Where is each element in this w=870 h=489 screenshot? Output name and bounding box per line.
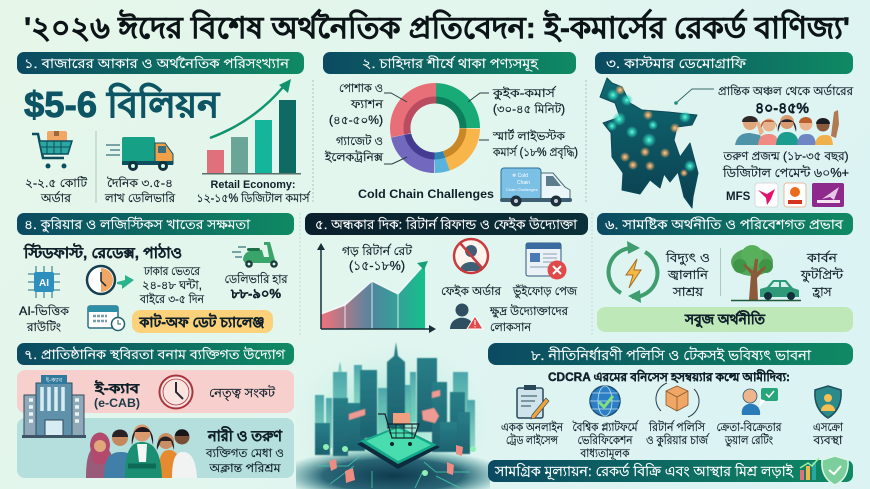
circuit base <box>296 426 490 489</box>
illustration: women and youth <box>86 424 197 478</box>
icon: cart <box>32 131 72 168</box>
MFS logos <box>726 183 844 207</box>
icon: growth and shield <box>800 456 848 485</box>
delivery rate: ৮৮-৯০% <box>230 286 281 301</box>
label: global platform verification <box>572 420 639 461</box>
callout: green economy <box>597 307 853 332</box>
label: orders: ২-২.৫ কোটি <box>25 176 88 190</box>
label: global platform verification: বাধ্যতামূলক <box>580 448 630 461</box>
heading 3 <box>595 52 853 74</box>
label: average return rate: গড় রিটার্ন রেট <box>342 244 412 258</box>
label: energy savings: সাশ্রয় <box>672 285 704 299</box>
icon: AI chip: AI <box>39 278 49 289</box>
label: escrow: ব্যবস্থা <box>812 435 843 447</box>
labels: fake <box>441 283 578 299</box>
icon: fake order <box>453 238 489 274</box>
labels: fake: ফেইক অর্ডার <box>441 284 502 298</box>
callout: cut-off date <box>132 310 273 333</box>
label: e-CAB: ই-ক্যাব <box>94 379 141 396</box>
icon: energy cycle <box>609 241 657 303</box>
icon: cold chain van: Chain Challenges <box>506 187 538 192</box>
teal band <box>17 418 294 478</box>
label: average return rate <box>342 244 412 273</box>
skyline <box>315 342 475 456</box>
label: dual rating: ডুয়াল রেটিং <box>724 433 773 448</box>
icon: scooter <box>232 242 278 268</box>
label: return policy <box>646 420 710 448</box>
label: daily delivery <box>104 176 176 205</box>
label: single trade license: ট্রেড লাইসেন্স <box>506 433 559 447</box>
label: AI routing: AI-ভিত্তিক <box>19 304 70 318</box>
label: loss <box>489 304 569 334</box>
icon: cold chain van: Chain <box>517 180 530 186</box>
youth and payment text: ডিজিটাল পেমেন্ট ৬০%+ <box>722 165 849 180</box>
icon: delivery truck <box>106 137 173 171</box>
heading 3: ৩. কাস্টমার ডেমোগ্রাফি <box>606 56 747 71</box>
panel: dark side <box>305 213 588 334</box>
panel: top products <box>323 52 578 206</box>
illustration: digital city <box>296 340 490 489</box>
label: orders: অর্ডার <box>40 191 72 205</box>
label: e-CAB: (e-CAB) <box>94 396 140 410</box>
label: global platform verification: ভেরিফিকেশন <box>578 433 634 447</box>
illustration: young people <box>735 110 839 145</box>
icon: small entrepreneur warning <box>450 304 483 329</box>
label: loss: লোকসান <box>490 322 532 334</box>
label: women and youth: ব্যক্তিগত মেধা ও <box>205 446 284 460</box>
label: retail economy: Retail Economy: <box>210 179 296 191</box>
youth and payment text: তরুণ প্রজন্ম (১৮-৩৫ বছর) <box>723 149 848 163</box>
icon: escrow shield <box>815 386 841 418</box>
panel: market size <box>17 52 311 205</box>
label: orders <box>25 176 88 205</box>
heading 2: ২. চাহিদার শীর্ষে থাকা পণ্যসমূহ <box>362 56 539 72</box>
panel: customer demographics <box>595 52 854 208</box>
labels: fashion and gadgets: ইলেকট্রনিক্স <box>324 150 384 164</box>
label: AI routing <box>19 304 70 334</box>
label: carbon footprint: কার্বন <box>806 250 838 265</box>
label: women and youth: নারী ও তরুণ <box>207 426 283 445</box>
panel: institutional stagnation vs individual enterprise <box>17 343 294 478</box>
callout: green economy: সবুজ অর্থনীতি <box>684 310 765 329</box>
heading 8 <box>488 343 853 365</box>
delivery time text: ২৪-৪৮ ঘন্টা, <box>142 278 202 292</box>
label: e-CAB <box>94 379 141 410</box>
labels: fashion and gadgets: পোশাক ও <box>339 83 383 95</box>
footer bar: সামগ্রিক মূল্যায়ন: রেকর্ড বিক্রি এবং আস্থার মিশ্র লড়াই <box>494 463 794 480</box>
heading 2 <box>323 52 576 74</box>
heading 4 <box>17 213 294 235</box>
icon: globe check <box>590 386 620 416</box>
marginal area stat <box>718 84 854 117</box>
panel: policy and sustainability <box>488 343 853 485</box>
label: dual rating: ক্রেতা-বিক্রেতার <box>716 420 782 434</box>
marginal area stat: ৪০-৪৫% <box>755 100 809 117</box>
city glow <box>296 340 490 489</box>
icon: shopping cart <box>378 413 419 446</box>
delivery rate: ডেলিভারি হার <box>224 272 288 286</box>
delivery time text: বাইরে ৩-৫ দিন <box>139 292 205 306</box>
label: loss: ক্ষুদ্র উদ্যোক্তাদের <box>489 304 569 319</box>
icon: cold chain van <box>500 168 572 206</box>
subtitle: CDCRA এরমের বনিসেস হসম্বয়্যার কল্মে আমীদিব্য: <box>548 369 790 384</box>
callout: cut-off date: কাট-অফ ডেট চ্যালেঞ্জ <box>138 313 265 330</box>
labels: fake: ভুঁইফোড় পেজ <box>512 283 578 299</box>
labels: fashion and gadgets: (৪৫-৫০%) <box>329 115 383 127</box>
donut chart <box>384 82 489 174</box>
area chart: return rate <box>317 243 436 333</box>
heading 7: ৭. প্রাতিষ্ঠানিক স্থবিরতা বনাম ব্যক্তিগত উদ্যোগ <box>24 347 286 362</box>
panel: courier and logistics <box>17 213 294 334</box>
icon: calendar <box>88 306 124 330</box>
labels: quick commerce and livestock <box>492 86 578 160</box>
icon: clock <box>160 376 192 408</box>
map of Bangladesh <box>600 78 698 208</box>
label: escrow <box>812 422 844 447</box>
icon: e-CAB building: ই-ক্যাব <box>45 377 63 384</box>
delivery time text <box>139 266 205 306</box>
label: escrow: এসক্রো <box>813 422 844 434</box>
heading 1 <box>17 52 304 74</box>
delivery time text: ঢাকার ভেতরে <box>143 266 201 278</box>
heading 5 <box>305 213 588 235</box>
label: single trade license <box>501 420 564 447</box>
label: leadership crisis: নেতৃত্ব সংকট <box>209 385 276 401</box>
label: energy savings: জ্বালানি <box>667 267 709 282</box>
label: energy savings <box>665 250 710 299</box>
icon: cold chain van: ❄ Cold <box>512 173 528 179</box>
label: dual rating <box>716 420 782 448</box>
labels: quick commerce and livestock: (৩০-৪৫ মিনিট) <box>493 102 565 116</box>
courier names: স্টিডফাস্ট, রেডেক্স, পাঠাও <box>23 243 182 262</box>
label: carbon footprint: হ্রাস <box>812 285 832 299</box>
label: retail economy: ১২-১৫% ডিজিটাল কমার্স <box>196 191 311 205</box>
label: global platform verification: বৈশ্বিক প্ল্যাটফর্মে <box>572 420 639 434</box>
label: cold chain: Cold Chain Challenges <box>358 187 494 201</box>
panel: macro economy and environment <box>597 213 853 332</box>
icon: clock with arrow <box>87 266 134 294</box>
label: return policy: রিটার্ন পলিসি <box>648 420 706 434</box>
icon: tree and car <box>731 245 801 300</box>
labels: fashion and gadgets <box>324 83 384 164</box>
label: carbon footprint: ফুটপ্রিন্ট <box>800 267 844 283</box>
big number: $5-6 বিলিয়ন <box>24 83 221 125</box>
heading 7 <box>17 343 294 365</box>
label: single trade license: একক অনলাইন <box>501 420 564 434</box>
label: women and youth: অক্লান্ত পরিশ্রম <box>208 461 281 475</box>
icon: AI chip <box>28 266 60 298</box>
labels: fashion and gadgets: ফ্যাশন <box>350 99 384 111</box>
icon: return box <box>656 383 699 417</box>
label: carbon footprint <box>800 250 844 299</box>
footer bar <box>488 456 853 485</box>
heading 6 <box>597 213 853 235</box>
heading 5: ৫. অন্ধকার দিক: রিটার্ন রিফান্ড ও ফেইক উদ্যোক্তা <box>315 217 577 232</box>
icon: dual rating <box>742 388 778 415</box>
labels: quick commerce and livestock: কুইক-কমার্স <box>492 86 557 101</box>
callout line <box>674 89 714 105</box>
icon: fake page <box>526 243 566 280</box>
labels: fashion and gadgets: গ্যাজেট ও <box>336 134 383 148</box>
labels: quick commerce and livestock: স্মার্ট লাইভস্টক <box>492 129 566 143</box>
label: average return rate: (১৫-১৮%) <box>349 258 405 273</box>
bar chart with growth arrow <box>202 79 301 174</box>
pink band <box>17 370 294 413</box>
label: retail economy <box>196 179 311 205</box>
label: daily delivery: লাখ ডেলিভারি <box>104 191 176 205</box>
MFS logos: MFS <box>726 191 751 203</box>
heading 1: ১. বাজারের আকার ও অর্থনৈতিক পরিসংখ্যান <box>24 56 289 71</box>
heading 8: ৮. নীতিনির্ধারণী পলিসি ও টেকসই ভবিষ্যৎ ভাবনা <box>531 347 812 363</box>
youth and payment text <box>722 149 849 180</box>
icon: clipboard license <box>517 385 549 419</box>
title: '২০২৬ ঈদের বিশেষ অর্থনৈতিক প্রতিবেদন: ই-কমার্সের রেকর্ড বাণিজ্য' <box>24 9 850 45</box>
icon: e-CAB building <box>22 375 86 438</box>
label: energy savings: বিদ্যুৎ ও <box>665 250 710 266</box>
delivery rate <box>224 272 288 301</box>
marginal area stat: প্রান্তিক অঞ্চল থেকে অর্ডারের <box>718 84 854 98</box>
label: daily delivery: দৈনিক ৩.৫-৪ <box>107 176 173 190</box>
label: women and youth <box>205 426 284 475</box>
labels: quick commerce and livestock: কমার্স (১৮% প্রবৃদ্ধি) <box>492 145 578 160</box>
label: AI routing: রাউটিং <box>26 320 61 334</box>
heading 6: ৬. সামষ্টিক অর্থনীতি ও পরিবেশগত প্রভাব <box>605 217 844 232</box>
label: return policy: ও কুরিয়ার চার্জ <box>646 433 710 448</box>
heading 4: ৪. কুরিয়ার ও লজিস্টিকস খাতের সক্ষমতা <box>24 217 250 233</box>
